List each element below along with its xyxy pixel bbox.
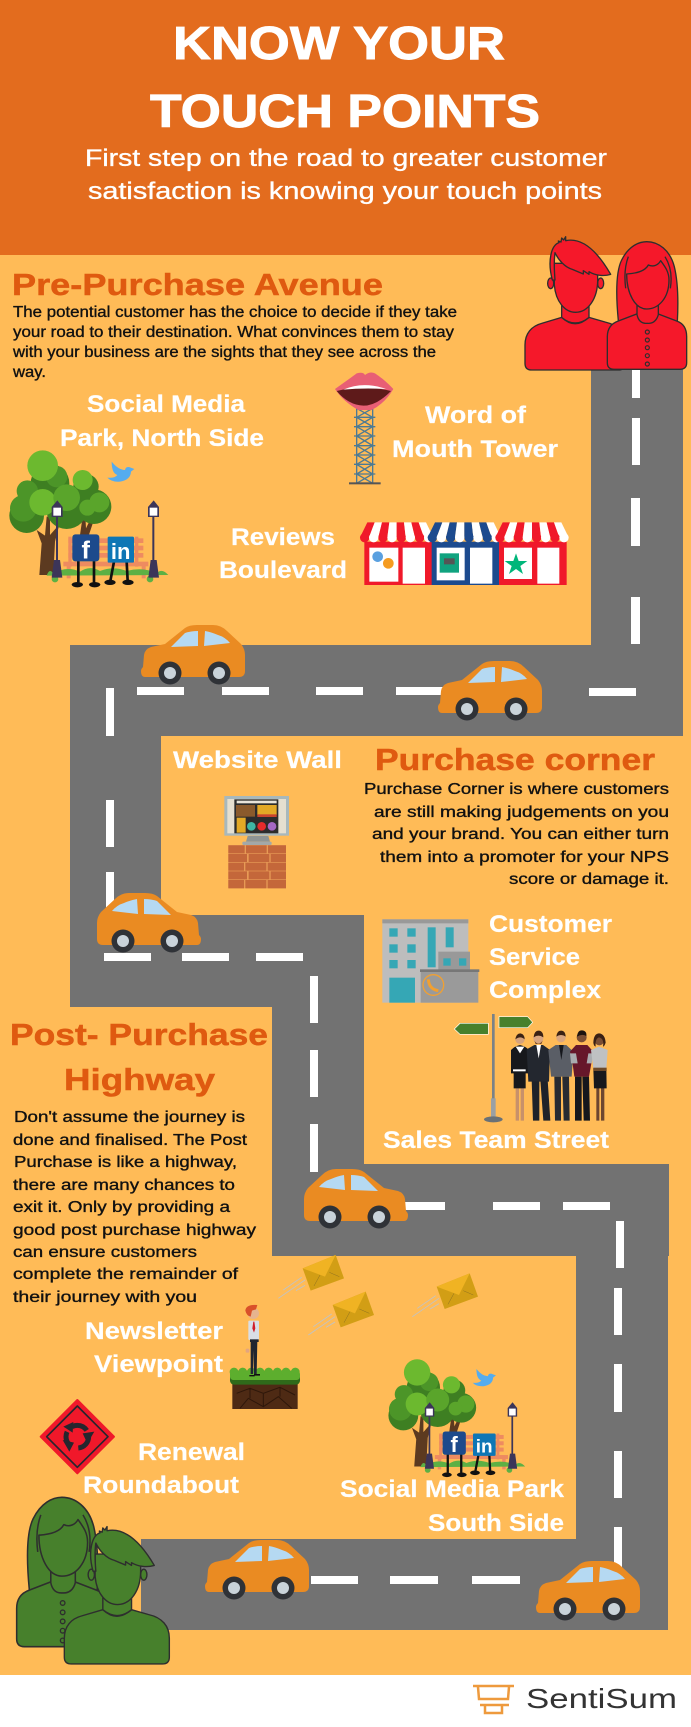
label: Newsletter Viewpoint: Newsletter <box>85 1318 223 1345</box>
label: Reviews Boulevard: Boulevard <box>219 557 347 584</box>
logo: SentiSum: SentiSum <box>526 1683 677 1714</box>
icon: roundabout road sign <box>41 1400 114 1473</box>
label: Reviews Boulevard <box>219 524 347 584</box>
heading: Post-Purchase Highway: Post- Purchase <box>10 1017 268 1052</box>
subtitle <box>85 145 607 205</box>
text: purchase description: Purchase Corner is where customers <box>364 781 669 798</box>
label: Renewal Roundabout <box>83 1439 245 1499</box>
text: post-purchase description: their journey with you <box>13 1289 197 1306</box>
icon: park north side <box>9 450 168 587</box>
label: Reviews Boulevard: Reviews <box>231 524 335 551</box>
heading: Pre-Purchase Avenue: Pre-Purchase Avenue <box>12 267 383 302</box>
text: purchase description <box>364 781 669 888</box>
label: Social Media Park South Side <box>340 1476 565 1537</box>
title: KNOW YOUR <box>173 17 505 69</box>
label: Social Media Park South Side: South Side <box>428 1510 564 1537</box>
car 6 <box>536 1561 640 1620</box>
icon: man on viewpoint platform <box>230 1305 300 1409</box>
icon: website wall <box>224 796 289 888</box>
icon: park north side: in <box>111 539 130 564</box>
text: post-purchase description: done and finalised. The Post <box>13 1132 248 1149</box>
text: pre-purchase description: way. <box>12 364 46 381</box>
text: purchase description: them into a promoter for your NPS <box>380 849 669 866</box>
car 1 <box>141 625 245 684</box>
icon: red customers <box>525 237 687 370</box>
text: post-purchase description: complete the remainder of <box>13 1266 239 1283</box>
icon: park south side: in <box>476 1437 493 1458</box>
heading: Post-Purchase Highway <box>10 1017 268 1097</box>
road centre dashes <box>104 370 640 1584</box>
label: Social Media Park, North Side <box>60 391 264 452</box>
icon: green customers <box>17 1497 169 1664</box>
text: post-purchase description: good post purchase highway <box>13 1222 256 1239</box>
text: post-purchase description: can ensure customers <box>13 1244 197 1261</box>
car 5 <box>205 1540 309 1600</box>
heading: Post-Purchase Highway: Highway <box>64 1062 216 1097</box>
subtitle: satisfaction is knowing your touch points <box>88 178 602 205</box>
label: Website Wall: Website Wall <box>173 747 342 774</box>
label: Social Media Park South Side: Social Media Park <box>340 1476 565 1503</box>
label: Social Media Park, North Side: Park, North Side <box>60 425 264 452</box>
label: Renewal Roundabout: Renewal <box>138 1439 245 1466</box>
label: Word of Mouth Tower: Mouth Tower <box>392 436 558 463</box>
label: Newsletter Viewpoint <box>85 1318 223 1378</box>
car 2 <box>438 661 542 720</box>
label: Renewal Roundabout: Roundabout <box>83 1472 239 1499</box>
label: Social Media Park, North Side: Social Media <box>87 391 246 418</box>
text: pre-purchase description: your road to their destination. What convinces them to stay <box>13 324 454 341</box>
text: pre-purchase description <box>12 304 457 381</box>
icon: flying envelopes <box>278 1255 478 1335</box>
text: post-purchase description: Purchase is like a highway, <box>14 1154 237 1171</box>
text: purchase description: score or damage it. <box>509 871 669 888</box>
label: Word of Mouth Tower <box>392 402 558 463</box>
icon: word of mouth tower <box>335 372 393 484</box>
title <box>150 17 540 137</box>
subtitle: First step on the road to greater customer <box>85 145 607 172</box>
winding road <box>70 360 683 1630</box>
text: pre-purchase description: The potential customer has the choice to decide if they take <box>13 304 457 321</box>
icon: park south side: f <box>450 1432 458 1457</box>
label: Newsletter Viewpoint: Viewpoint <box>94 1351 223 1378</box>
label: Customer Service Complex: Service <box>489 944 580 971</box>
icon: park north side: f <box>81 536 90 564</box>
text: pre-purchase description: with your business are the sights that they see across the <box>12 344 436 361</box>
label: Customer Service Complex: Complex <box>489 977 602 1004</box>
car 3 <box>97 893 201 952</box>
icon: park south side <box>388 1359 525 1477</box>
label: Word of Mouth Tower: Word of <box>425 402 527 429</box>
text: post-purchase description: exit it. Only by providing a <box>13 1199 230 1216</box>
text: purchase description: and your brand. You can either turn <box>372 826 669 843</box>
text: post-purchase description: Don't assume the journey is <box>14 1109 245 1126</box>
icon: review shops <box>360 522 569 585</box>
text: post-purchase description: there are many chances to <box>13 1177 235 1194</box>
footer band <box>0 1675 691 1727</box>
logo: SentiSum <box>473 1683 677 1714</box>
icon: customer service building <box>382 919 479 1003</box>
text: purchase description: are still making judgements on you <box>374 804 669 821</box>
header band <box>0 0 691 255</box>
heading: Purchase corner: Purchase corner <box>375 742 655 777</box>
car 4 <box>304 1169 408 1228</box>
icon: sales team and signpost <box>454 1014 608 1122</box>
label: Customer Service Complex <box>489 911 612 1004</box>
label: Customer Service Complex: Customer <box>489 911 612 938</box>
label: Sales Team Street: Sales Team Street <box>383 1127 609 1154</box>
title: TOUCH POINTS <box>150 85 540 137</box>
text: post-purchase description <box>13 1109 256 1306</box>
